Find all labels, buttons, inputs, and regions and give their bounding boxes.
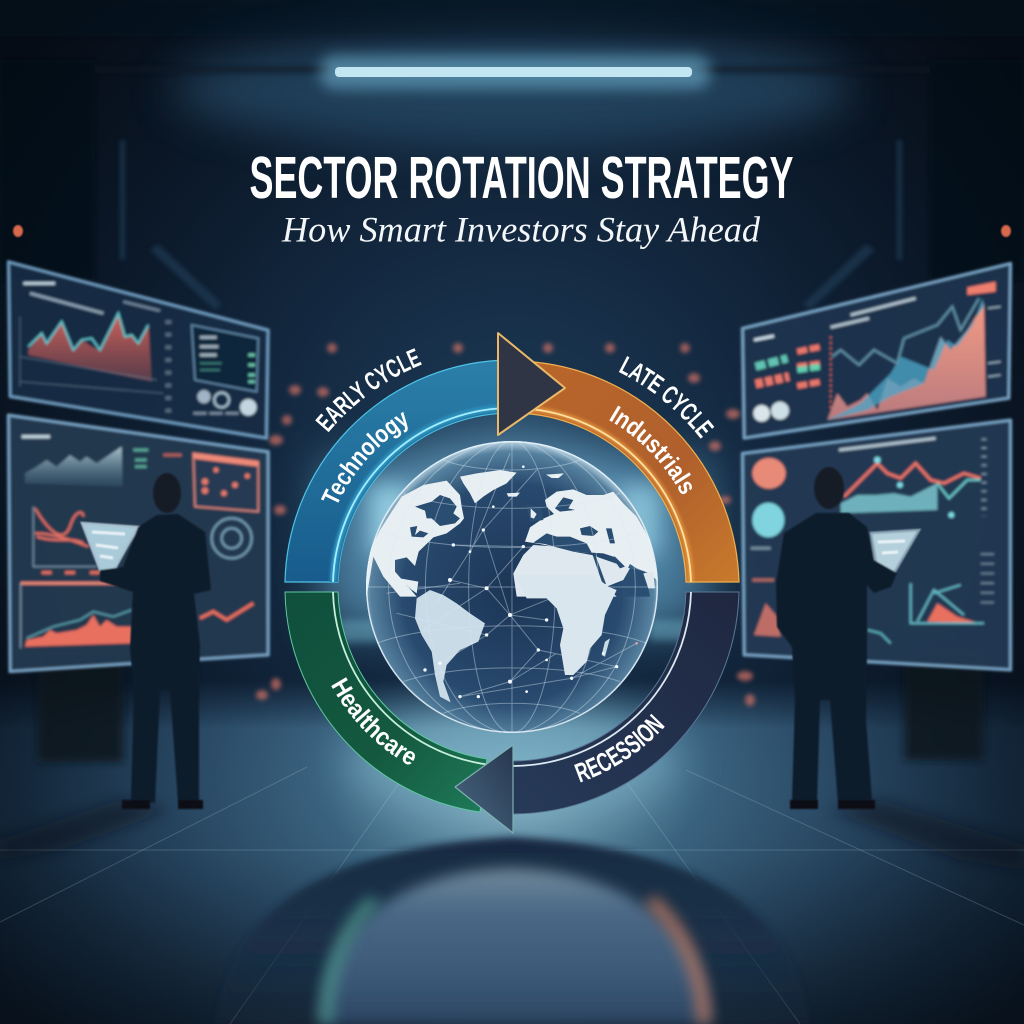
ceiling light bar — [320, 55, 710, 89]
side data table — [192, 325, 258, 392]
segment: late cycle orange arc — [525, 361, 739, 582]
panel: right upper dashboard — [742, 263, 1011, 438]
panel: left lower dashboard — [8, 415, 268, 672]
figure: right analyst — [776, 467, 919, 809]
glow behind globe — [307, 380, 717, 680]
continents: southern hemisphere — [400, 575, 617, 702]
segment: recession navy arc — [513, 592, 739, 814]
globe — [360, 441, 660, 733]
arrow: bottom arrowhead — [455, 745, 513, 833]
label: recession: RECESSION — [574, 714, 665, 782]
label: healthcare: Healthcare — [331, 677, 415, 764]
label: early cycle: EARLY CYCLE — [315, 348, 422, 432]
glow bands behind cycle — [320, 460, 710, 642]
figure: left analyst — [82, 473, 211, 809]
panel: right lower dashboard — [742, 420, 1011, 670]
cycle ring — [285, 333, 739, 833]
ring shadow on floor — [215, 837, 810, 1024]
arrow: top arrowhead — [498, 333, 565, 435]
subtitle: How Smart Investors Stay Ahead — [281, 210, 761, 250]
label: technology: Technology — [321, 412, 408, 503]
panel: left upper dashboard — [8, 262, 268, 438]
bokeh lights — [256, 343, 755, 706]
left tablet — [82, 523, 138, 572]
label: industrials: Industrials — [609, 406, 692, 494]
label: late cycle: LATE CYCLE — [618, 356, 714, 439]
column bases — [38, 650, 983, 762]
continents: northern hemisphere — [360, 470, 660, 597]
graticule and network lines — [366, 441, 658, 733]
segment: early cycle blue arc — [285, 360, 498, 582]
segment: healthcare green arc — [285, 592, 487, 812]
right tablet — [871, 530, 919, 573]
area chart — [20, 313, 163, 393]
floor — [0, 650, 1024, 1024]
